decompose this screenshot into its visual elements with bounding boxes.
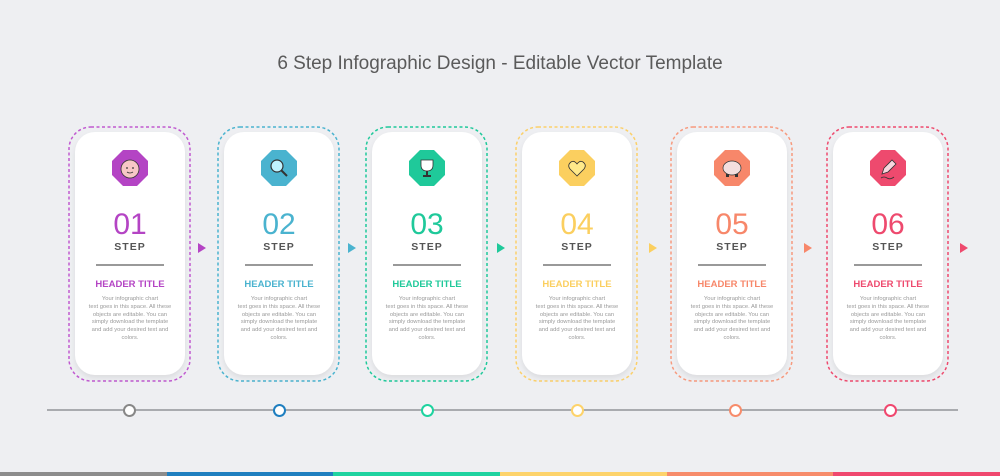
body text: Your infographic chart [102,296,158,302]
body text: colors. [121,335,139,341]
timeline dot 6 [884,404,897,417]
arrow 4 [649,243,657,253]
arrow 5 [804,243,812,253]
body text: objects are editable. You can [242,312,316,318]
card 2 [217,126,340,382]
header: HEADER TITLE [853,279,923,290]
body text: objects are editable. You can [390,312,464,318]
body text: and add your desired text and [241,327,317,333]
body text: colors. [418,335,436,341]
arrow 3 [497,243,505,253]
body text: colors. [270,335,288,341]
number: 03 [410,208,444,241]
icon: piggy bank [714,150,750,186]
body text: Your infographic chart [704,296,760,302]
header: HEADER TITLE [95,279,165,290]
body text: and add your desired text and [850,327,926,333]
card 4: STEP [561,241,593,253]
number: 05 [715,208,749,241]
body text: simply download the template [694,319,770,325]
body text [238,296,320,341]
card 5 [670,126,793,382]
timeline [47,409,958,411]
timeline dot 3 [421,404,434,417]
body text: colors. [723,335,741,341]
timeline dot 2 [273,404,286,417]
body text: and add your desired text and [92,327,168,333]
body text: simply download the template [241,319,317,325]
bottom color stripe [0,472,1000,476]
body text [846,296,929,341]
timeline dot 4 [571,404,584,417]
body text: Your infographic chart [399,296,455,302]
header: HEADER TITLE [244,279,314,290]
body text: text goes in this space. All these [536,304,618,310]
icon: magnifier [261,150,297,186]
header: HEADER TITLE [392,279,462,290]
number: 01 [113,208,147,241]
body text [386,296,468,341]
body text: text goes in this space. All these [386,304,468,310]
header: HEADER TITLE [542,279,612,290]
icon: trophy [409,150,445,186]
body text [690,296,773,341]
card 6: STEP [872,241,904,253]
body text: simply download the template [389,319,465,325]
body text: simply download the template [92,319,168,325]
header: HEADER TITLE [697,279,767,290]
body text: and add your desired text and [539,327,615,333]
body text: text goes in this space. All these [691,304,773,310]
body text [536,296,618,341]
body text: colors. [568,335,586,341]
card 3 [365,126,488,382]
icon: pencil [870,150,906,186]
card 3: STEP [411,241,443,253]
card 4 [515,126,638,382]
timeline dot 1 [123,404,136,417]
card 2: STEP [263,241,295,253]
body text: simply download the template [539,319,615,325]
number: 02 [262,208,296,241]
body text: and add your desired text and [694,327,770,333]
body text [88,296,171,341]
icon: heart [559,150,595,186]
body text: objects are editable. You can [93,312,167,318]
number: 04 [560,208,594,241]
body text: text goes in this space. All these [89,304,171,310]
body text: simply download the template [850,319,926,325]
card 5: STEP [716,241,748,253]
icon: face [112,150,148,186]
title: 6 Step Infographic Design - Editable Vector Template [277,53,723,74]
timeline dot 5 [729,404,742,417]
card 6 [826,126,949,382]
body text: Your infographic chart [549,296,605,302]
card 1: STEP [114,241,146,253]
body text: colors. [879,335,897,341]
body text: objects are editable. You can [851,312,925,318]
body text: Your infographic chart [860,296,916,302]
number: 06 [871,208,905,241]
arrow 1 [198,243,206,253]
body text: Your infographic chart [251,296,307,302]
card 1 [68,126,191,382]
body text: text goes in this space. All these [847,304,929,310]
arrow 2 [348,243,356,253]
arrow 6 [960,243,968,253]
body text: objects are editable. You can [695,312,769,318]
body text: text goes in this space. All these [238,304,320,310]
body text: and add your desired text and [389,327,465,333]
body text: objects are editable. You can [540,312,614,318]
